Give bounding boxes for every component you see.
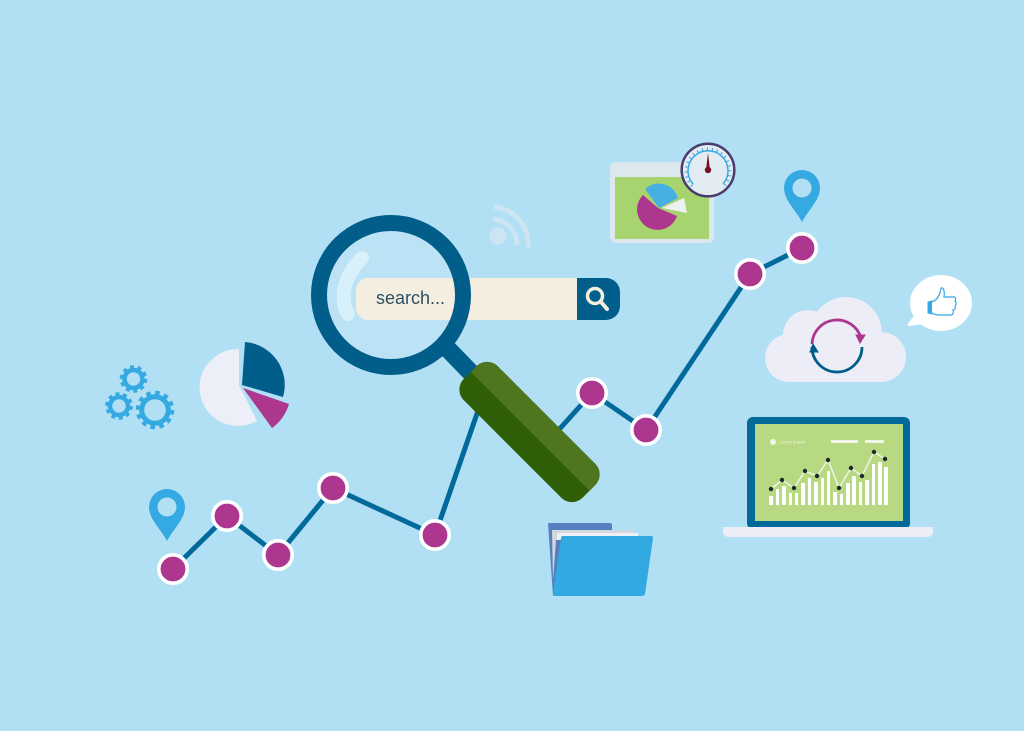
chart line: left segment xyxy=(173,248,802,569)
screen header xyxy=(770,439,884,445)
screen header: Lorem Ipsum xyxy=(779,440,806,444)
data points xyxy=(159,234,816,583)
search button xyxy=(577,278,620,320)
laptop base xyxy=(723,527,933,537)
window pie chart xyxy=(637,184,687,230)
white slice xyxy=(200,349,257,426)
icon: wifi signal xyxy=(490,207,528,247)
laptop screen xyxy=(755,424,903,521)
lens highlight xyxy=(344,258,362,314)
icon: speech bubble with thumbs up xyxy=(908,275,972,331)
magenta slice xyxy=(243,388,289,428)
chart line: right segment xyxy=(555,248,802,434)
lens background xyxy=(319,223,463,367)
icon: gears xyxy=(107,367,172,427)
top gear xyxy=(121,367,146,391)
icon: gauge xyxy=(682,144,734,196)
handle xyxy=(453,356,606,508)
sync arrows xyxy=(810,320,865,372)
icon: right location pin xyxy=(784,170,820,222)
magnifying glass xyxy=(319,223,606,508)
bar chart xyxy=(769,462,888,505)
pie chart xyxy=(200,342,289,428)
icon: button magnifier xyxy=(588,288,607,309)
panel: pie chart window xyxy=(610,162,714,243)
lens ring xyxy=(319,223,463,367)
icon: laptop with chart xyxy=(723,417,933,537)
search bar xyxy=(356,278,620,320)
shaft xyxy=(446,347,476,378)
icon: left location pin xyxy=(149,489,185,541)
search placeholder text: search... xyxy=(376,288,445,308)
thumb xyxy=(928,288,956,315)
icon: folder xyxy=(548,523,653,596)
line chart xyxy=(769,450,887,491)
laptop body xyxy=(747,417,910,529)
left gear xyxy=(107,394,131,418)
icon: cloud sync xyxy=(765,297,906,382)
dark blue slice xyxy=(242,342,285,397)
large gear xyxy=(138,393,172,427)
